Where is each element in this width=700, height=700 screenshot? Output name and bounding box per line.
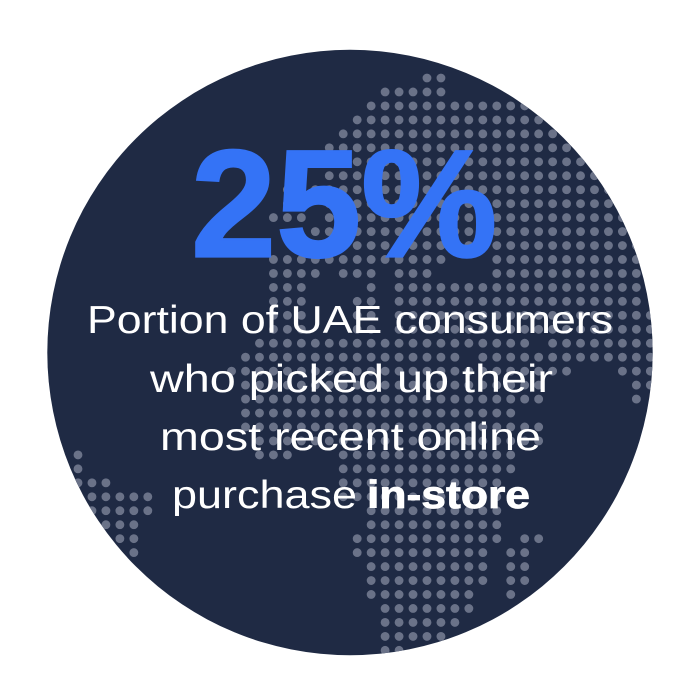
description text [87,299,613,517]
description text: Portion of UAE consumers [87,299,613,342]
description text: most recent online [160,416,541,459]
description text: purchase [172,474,357,517]
description text: in-store [367,474,530,517]
panel: navy circle [47,50,653,655]
big number: 25%: 25% [191,118,497,290]
description text: who picked up their [149,358,553,401]
dotted world map [78,78,650,650]
